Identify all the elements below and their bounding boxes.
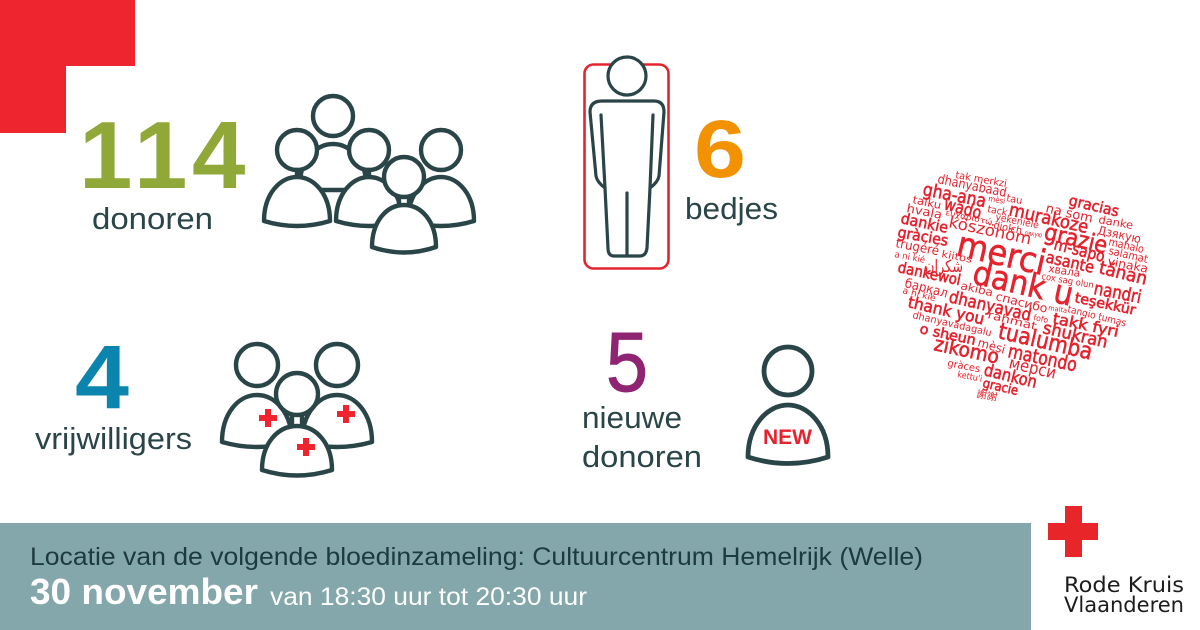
heart word cloud of thank you words: akiba: [959, 279, 994, 299]
stat: 4 vrijwilligers: [35, 328, 192, 456]
heart word cloud of thank you words: a hi kié: [901, 285, 937, 304]
heart word cloud of thank you words: diolch: [992, 220, 1023, 237]
heart word cloud of thank you words: хвала: [1048, 262, 1081, 280]
heart word cloud of thank you words: dankewol: [896, 258, 963, 289]
stat: 114 donoren: [79, 102, 245, 236]
heart word cloud of thank you words: a ni kié: [893, 249, 926, 266]
heart word cloud of thank you words: спасибо: [994, 289, 1049, 316]
red corner shape: [0, 0, 135, 133]
heart word cloud of thank you words: fofo: [1033, 313, 1049, 325]
heart word cloud of thank you words: malta: [1048, 304, 1068, 315]
label bedjes: bedjes: [685, 191, 778, 226]
heart word cloud of thank you words: grazie: [1042, 220, 1110, 259]
heart word cloud of thank you words: köszönöm: [947, 212, 1033, 248]
heart word cloud of thank you words: tangio tumas: [1066, 304, 1127, 329]
number 4: 4: [75, 328, 129, 428]
heart word cloud of thank you words: kiitos: [940, 249, 973, 266]
heart word cloud of thank you words: na som: [1044, 201, 1094, 227]
heart word cloud of thank you words: kettu'i: [956, 370, 983, 385]
heart word cloud of thank you words: dankie: [899, 209, 950, 237]
info bar: [0, 523, 1031, 630]
icon: new donor: NEW: [763, 426, 812, 449]
heart word cloud of thank you words: trugéré: [894, 236, 940, 259]
heart word cloud of thank you words: ευχαριστώ: [945, 207, 994, 227]
heart word cloud of thank you words: tack: [986, 204, 1008, 219]
label nieuwe donoren: donoren: [582, 439, 702, 474]
heart word cloud of thank you words: murakoze: [1007, 199, 1091, 238]
stat: 5 nieuwe donoren: [582, 315, 702, 474]
heart word cloud of thank you words: çox sag olun: [1040, 272, 1094, 291]
heart word cloud of thank you words: rahmat: [986, 308, 1039, 333]
heart word cloud of thank you words: asante: [1044, 247, 1096, 277]
heart word cloud of thank you words: gracias: [1067, 191, 1121, 220]
heart word cloud of thank you words: gracie: [981, 376, 1020, 399]
icon: volunteers with red crosses: [222, 344, 372, 476]
heart word cloud of thank you words: yekeniele: [994, 212, 1040, 231]
heart word cloud of thank you words: mèsi: [988, 193, 1006, 206]
heart word cloud of thank you words: شكران: [925, 257, 963, 277]
heart word cloud of thank you words: hvala: [905, 201, 943, 222]
heart word cloud of thank you words: tak merkzi: [954, 170, 1008, 190]
heart word cloud of thank you words: мерси: [1007, 353, 1058, 384]
heart word cloud of thank you words: zikomo: [932, 331, 1002, 369]
heart word cloud of thank you words: danke: [1097, 213, 1134, 232]
label donoren: donoren: [92, 201, 213, 236]
label nieuwe donoren: nieuwe: [582, 400, 682, 435]
icon: person on bed: [584, 57, 668, 268]
logo text: Vlaanderen: [1064, 593, 1184, 617]
logo: Rode Kruis Vlaanderen: [1048, 506, 1184, 617]
heart word cloud of thank you words: dhanyavad: [947, 287, 1033, 326]
heart word cloud of thank you words: thank you: [906, 292, 986, 328]
heart word cloud of thank you words: nandri: [1092, 278, 1143, 308]
heart word cloud of thank you words: tănan: [1097, 257, 1149, 290]
heart word cloud of thank you words: mahalo: [1107, 235, 1146, 256]
heart word cloud of thank you words: dhanyavadagalu: [911, 310, 993, 339]
heart word cloud of thank you words: matondo: [1006, 340, 1079, 376]
heart word cloud of thank you words: дякую: [1024, 229, 1043, 239]
logo text: Rode Kruis: [1064, 573, 1184, 597]
heart word cloud of thank you words: o sheun: [918, 321, 977, 349]
heart word cloud of thank you words: takk fyri: [1051, 309, 1120, 341]
icon: new donor: [748, 347, 828, 464]
heart word cloud of thank you words: [893, 170, 1150, 404]
heart word cloud of thank you words: mèsi: [976, 335, 1007, 357]
heart word cloud of thank you words: merci: [953, 225, 1050, 284]
date: 30 november: [30, 571, 258, 612]
number 6: 6: [694, 104, 746, 195]
heart word cloud of thank you words: 謝謝: [975, 387, 998, 404]
location line: Locatie van de volgende bloedinzameling: Cultuurcentrum Hemelrijk (Welle): [30, 543, 923, 571]
heart word cloud of thank you words: shukran: [1041, 318, 1110, 353]
heart word cloud of thank you words: taiku: [911, 193, 942, 212]
heart word cloud of thank you words: m-sapo: [1052, 234, 1107, 266]
number 5: 5: [606, 315, 648, 409]
stat: 6 bedjes: [685, 104, 778, 226]
heart word cloud of thank you words: vinaka: [1106, 254, 1149, 276]
heart word cloud of thank you words: salamat: [1107, 244, 1150, 266]
heart word cloud of thank you words: dhanyabaad: [936, 172, 1008, 201]
heart word cloud of thank you words: dank u: [969, 253, 1077, 314]
heart word cloud of thank you words: tualumba: [996, 319, 1095, 365]
time: van 18:30 uur tot 20:30 uur: [270, 583, 587, 611]
heart word cloud of thank you words: Дзякую: [1096, 223, 1142, 246]
heart word cloud of thank you words: wado: [942, 195, 984, 224]
label vrijwilligers: vrijwilligers: [35, 421, 192, 456]
heart word cloud of thank you words: барқал: [903, 276, 949, 302]
number 114: 114: [79, 102, 245, 209]
heart word cloud of thank you words: gràces: [946, 357, 981, 375]
icon: group of donors: [264, 96, 474, 252]
heart word cloud of thank you words: teşekkür: [1073, 290, 1137, 319]
red cross: [1048, 506, 1098, 557]
heart word cloud of thank you words: dankon: [982, 360, 1039, 393]
heart word cloud of thank you words: gha-ana: [921, 179, 988, 212]
heart word cloud of thank you words: gràcies: [896, 223, 950, 250]
heart word cloud of thank you words: tau: [1005, 193, 1023, 207]
